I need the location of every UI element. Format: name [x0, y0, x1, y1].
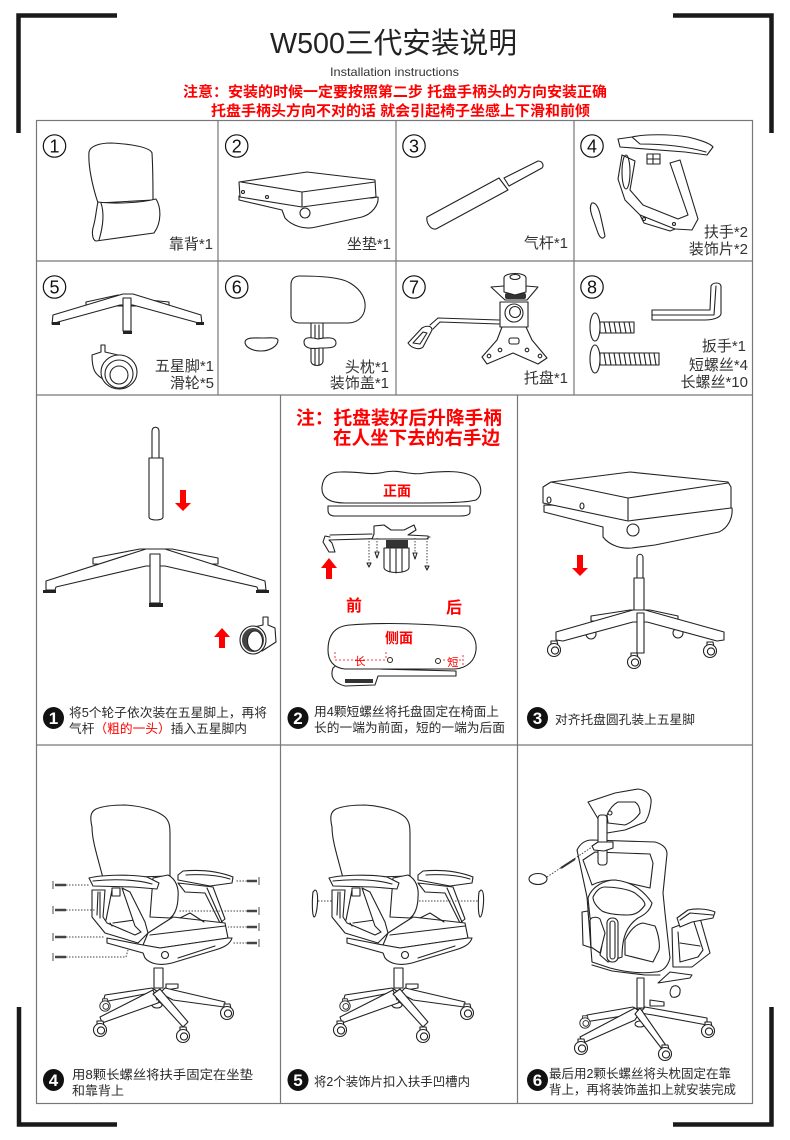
- warning note: 注意：安装的时候一定要按照第二步 托盘手柄头的方向安装正确: [183, 83, 607, 101]
- panel: part 5 star base and caster: 五星脚*1: [155, 358, 214, 375]
- step 5 caption: 将2个装饰片扣入扶手凹槽内: [314, 1075, 470, 1089]
- warning note: 托盘手柄头方向不对的话 就会引起椅子坐感上下滑和前倾: [211, 102, 591, 120]
- red note: [296, 408, 502, 448]
- step 6 caption: 6: [533, 1071, 542, 1090]
- panel: part 5 star base and caster: 5: [49, 278, 60, 298]
- panel: part 4 armrest: 扶手*2: [704, 224, 748, 241]
- title: W500三代安装说明: [270, 27, 517, 60]
- chair: [89, 805, 234, 1042]
- panel: step 6 headrest: [527, 789, 736, 1097]
- step 2 caption: 长的一端为前面，短的一端为后面: [314, 720, 505, 735]
- trim pieces: [312, 890, 484, 917]
- panel: part 7 tray mechanism: 托盘*1: [524, 369, 568, 387]
- warning note: [183, 83, 607, 120]
- panel: part 8 hex key and screws: 扳手*1: [702, 338, 746, 355]
- panel: step 4 armrests: [43, 805, 259, 1098]
- panel: part 7 tray mechanism: 7: [409, 278, 419, 298]
- arrow up: [214, 628, 230, 648]
- seat assembly: [543, 472, 732, 548]
- panel: part 8 hex key and screws: 短螺丝*4: [689, 357, 748, 374]
- step 4 caption: 用8颗长螺丝将扶手固定在坐垫: [72, 1067, 253, 1082]
- panel: part 4 armrest: [581, 135, 748, 258]
- cushion front view: [322, 471, 481, 516]
- step 3 caption: 3: [533, 709, 542, 728]
- panel: part 2 seat cushion: [226, 135, 391, 253]
- caster: [240, 617, 276, 654]
- panel: part 1 backrest: [43, 135, 213, 253]
- base with casters: [548, 554, 724, 668]
- parts table and step grid lines: [36, 120, 753, 1104]
- cushion side view: 侧面: [385, 630, 413, 646]
- front label: 前: [346, 596, 362, 615]
- cushion front view: 正面: [383, 483, 411, 499]
- step 2 caption: 用4颗短螺丝将托盘固定在椅面上: [314, 704, 499, 719]
- step 2 caption: [288, 704, 505, 735]
- step 2 caption: 2: [293, 709, 303, 728]
- panel: part 4 armrest: 装饰片*2: [689, 241, 748, 258]
- step 1 caption: 气杆（粗的一头）插入五星脚内: [69, 721, 247, 736]
- step 1 caption: 1: [49, 709, 58, 728]
- panel: step 2 tray to seat: [288, 408, 505, 735]
- panel: step 5 trim pieces: [288, 805, 484, 1091]
- panel: part 1 backrest: 1: [49, 136, 60, 156]
- step 6 caption: [527, 1067, 736, 1097]
- step 3 caption: 对齐托盘圆孔装上五星脚: [555, 712, 695, 727]
- panel: part 5 star base and caster: 滑轮*5: [170, 375, 214, 392]
- cushion side view: [328, 624, 476, 686]
- corner bracket: top left: [18, 16, 117, 133]
- step 4 caption: [43, 1067, 253, 1098]
- step 3 caption: [527, 707, 695, 729]
- red note: 在人坐下去的右手边: [333, 428, 500, 448]
- panel: part 2 seat cushion: 2: [232, 136, 242, 156]
- step 6 caption: 背上，再将装饰盖扣上就安装完成: [549, 1083, 736, 1097]
- panel: part 8 hex key and screws: 8: [587, 278, 597, 298]
- red note: 注：托盘装好后升降手柄: [296, 408, 502, 428]
- panel: part 8 hex key and screws: 长螺丝*10: [680, 374, 748, 391]
- corner bracket: bottom right: [673, 1007, 772, 1124]
- trim cap with dashed guide: [529, 847, 592, 884]
- panel: step 3 seat onto base: [527, 472, 732, 729]
- headrest with post: [588, 789, 651, 865]
- panel: part 7 tray mechanism: [403, 274, 568, 387]
- step 4 caption: 4: [49, 1071, 59, 1090]
- panel: part 3 gas lift: [403, 135, 568, 252]
- rear label: 后: [446, 599, 462, 617]
- gas lift: [149, 427, 163, 520]
- chair rear view: [574, 840, 715, 1060]
- panel: part 6 headrest: 头枕*1: [345, 359, 389, 376]
- cushion side view: 短: [448, 655, 458, 669]
- cushion side view: 长: [354, 655, 366, 668]
- tray with screws: [323, 525, 430, 573]
- panel: part 5 star base and caster: [43, 276, 214, 392]
- step 1 caption: 将5个轮子依次装在五星脚上，再将: [69, 705, 267, 720]
- panel: part 6 headrest: 6: [232, 278, 242, 298]
- panel: part 3 gas lift: 气杆*1: [524, 235, 568, 252]
- step 5 caption: 5: [293, 1071, 303, 1090]
- panel: part 2 seat cushion: 坐垫*1: [347, 236, 391, 253]
- long screws: [53, 877, 259, 961]
- corner bracket: top right: [673, 16, 772, 133]
- panel: step 1 gas lift into base: [43, 427, 276, 736]
- step 5 caption: [288, 1069, 470, 1091]
- chair: [329, 805, 474, 1042]
- subtitle: Installation instructions: [330, 65, 459, 79]
- step 1 caption: [43, 705, 267, 736]
- arrow down: [572, 555, 588, 576]
- arrow up: [321, 558, 337, 579]
- five-star base: [43, 549, 269, 607]
- step 6 caption: 最后用2颗长螺丝将头枕固定在靠: [549, 1067, 731, 1081]
- arrow down: [175, 490, 191, 511]
- panel: part 4 armrest: 4: [587, 136, 597, 156]
- panel: part 3 gas lift: 3: [409, 136, 419, 156]
- panel: part 8 hex key and screws: [581, 276, 748, 391]
- panel: part 1 backrest: 靠背*1: [169, 236, 213, 253]
- panel: part 6 headrest: [226, 276, 389, 392]
- step 4 caption: 和靠背上: [72, 1084, 124, 1098]
- corner bracket: bottom left: [19, 1007, 117, 1124]
- panel: part 6 headrest: 装饰盖*1: [330, 375, 389, 392]
